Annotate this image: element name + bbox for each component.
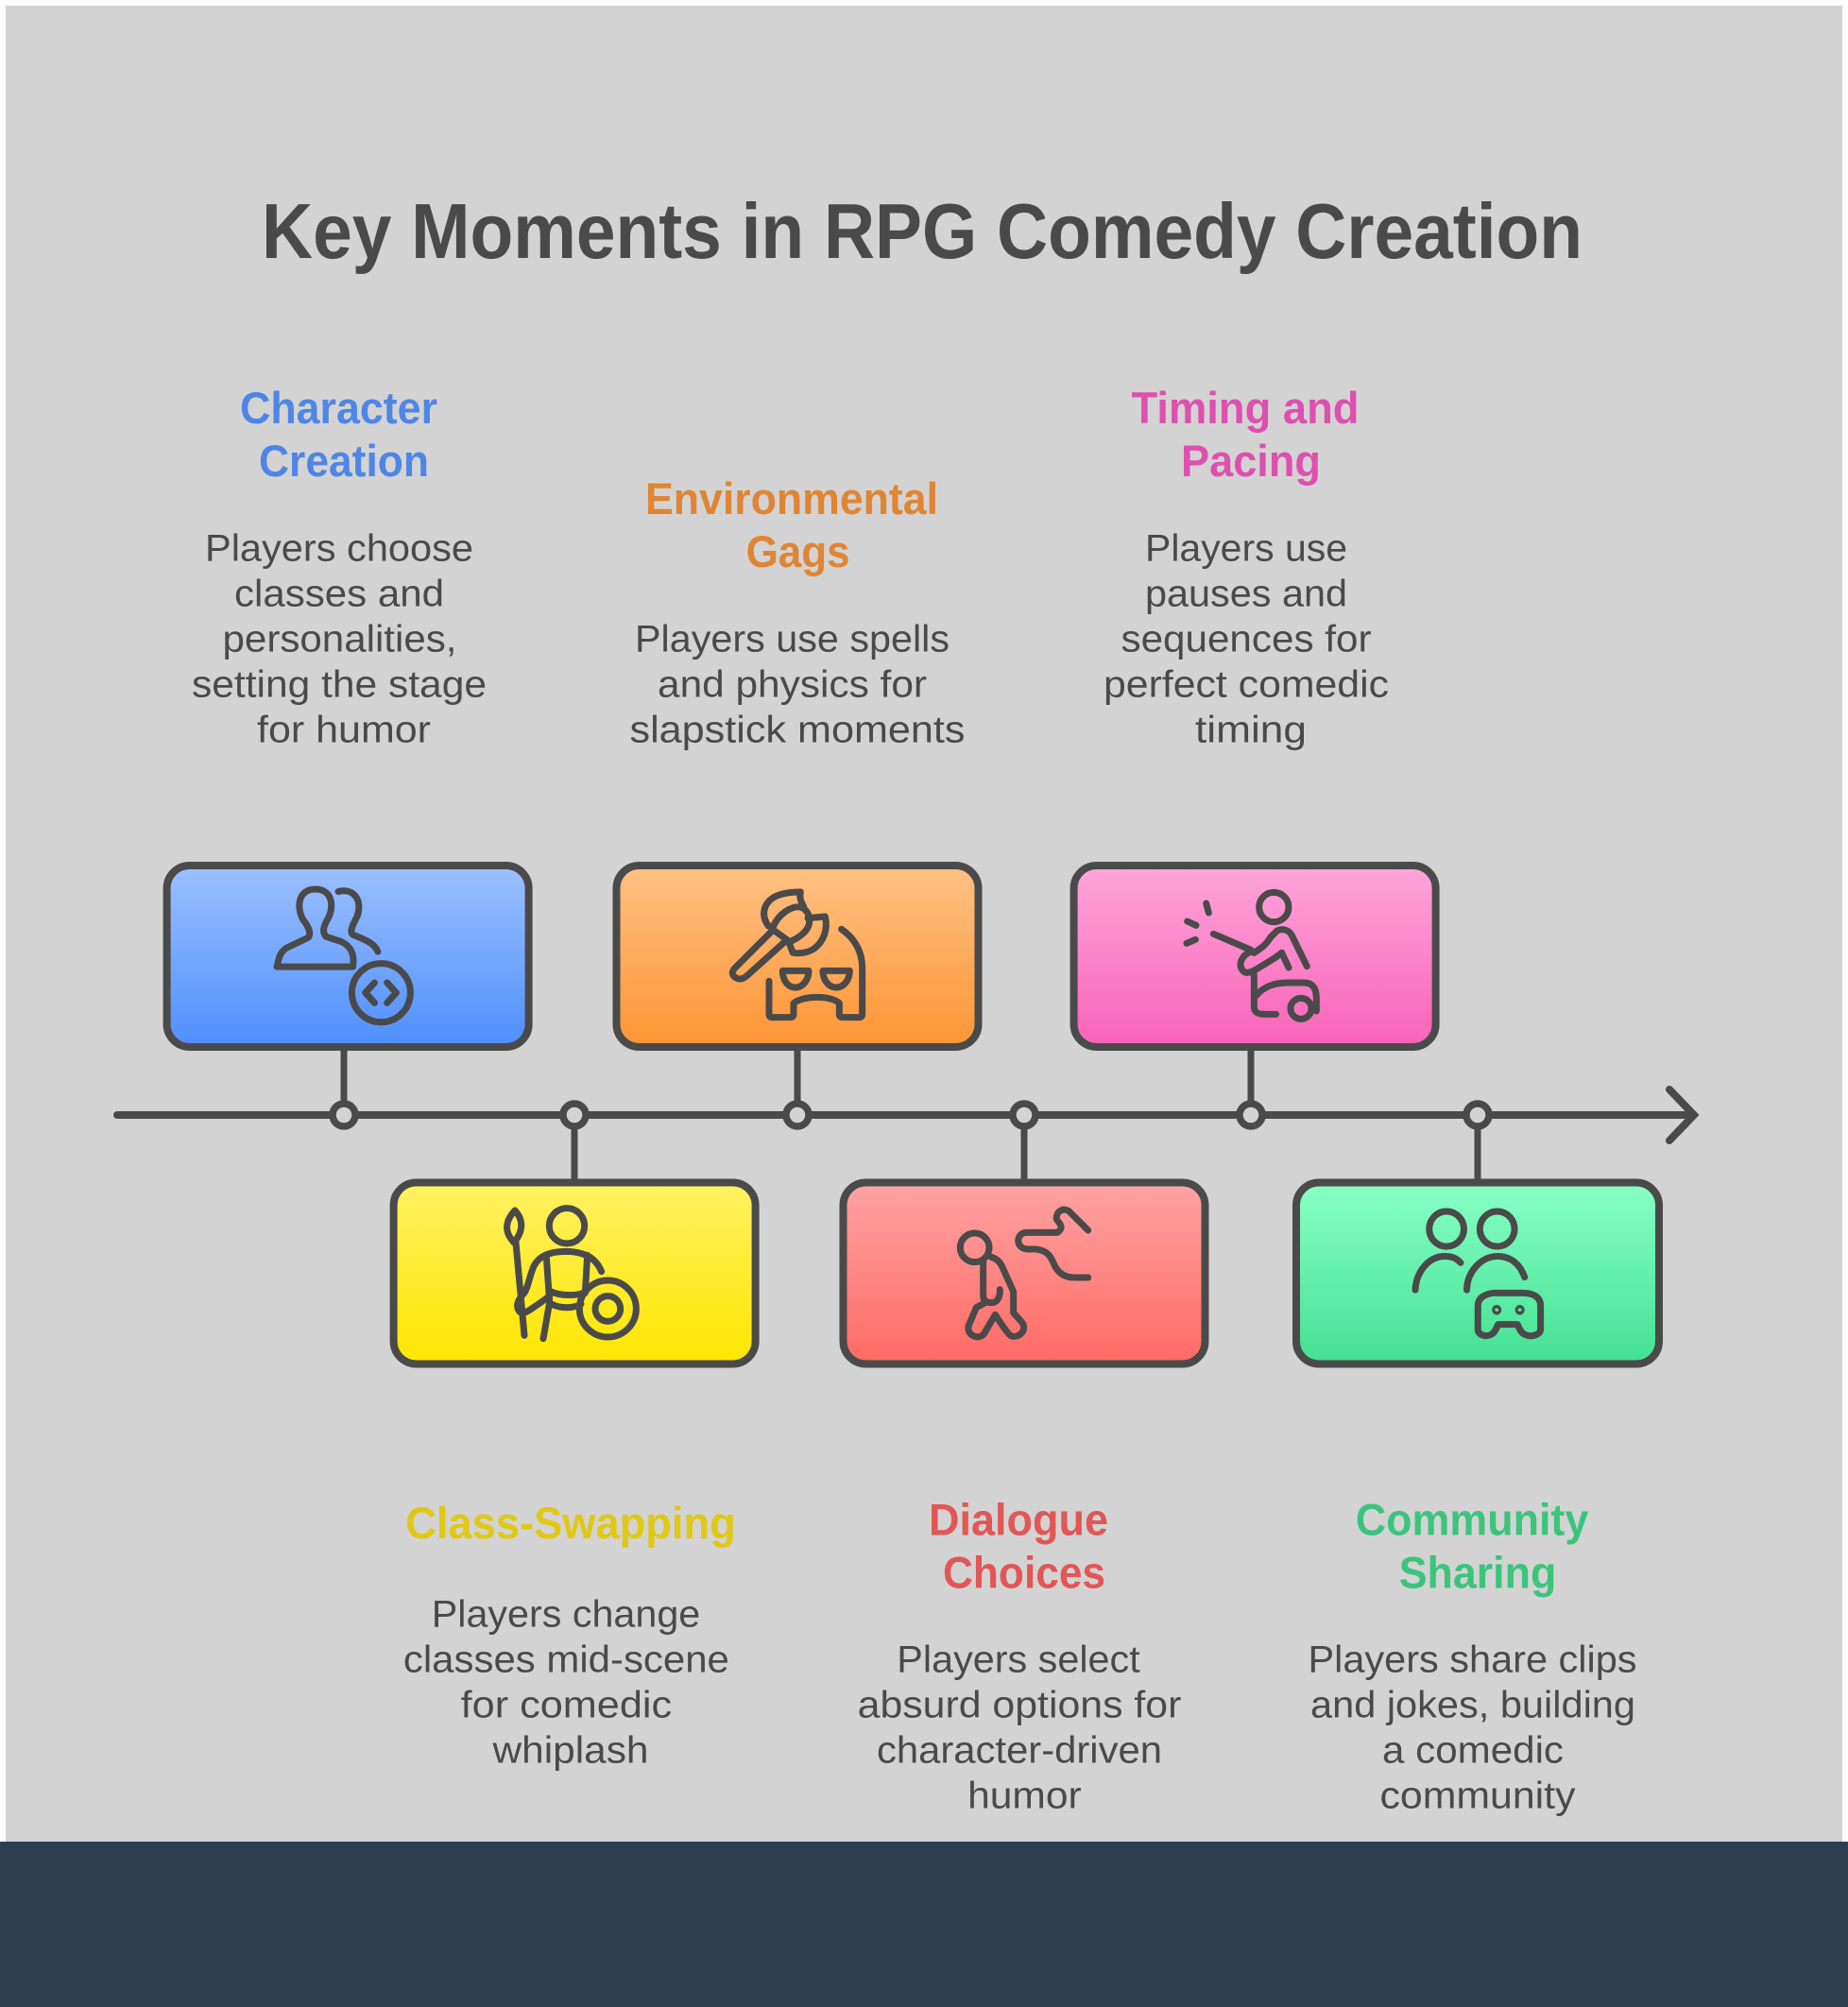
- connector: [1247, 1051, 1255, 1104]
- description: [403, 1593, 729, 1771]
- box: [167, 866, 529, 1047]
- panel: timing and pacing: [1074, 383, 1436, 1126]
- description: whiplash: [491, 1729, 648, 1771]
- panel: class-swapping: [394, 1104, 756, 1771]
- timeline axis with arrow: [117, 1089, 1694, 1141]
- heading: Character: [240, 383, 437, 433]
- node: [1466, 1104, 1489, 1126]
- icon: users with code badge: [277, 889, 410, 1022]
- description: [1308, 1638, 1636, 1816]
- description: [192, 527, 487, 750]
- description: [858, 1638, 1181, 1816]
- description: humor: [967, 1775, 1082, 1816]
- panel: community sharing: [1296, 1104, 1659, 1816]
- description: community: [1379, 1775, 1576, 1816]
- description: Players select: [897, 1638, 1140, 1680]
- description: timing: [1195, 709, 1307, 750]
- node: [786, 1104, 809, 1126]
- heading: Pacing: [1181, 436, 1321, 486]
- heading: Class-Swapping: [405, 1498, 736, 1548]
- connector: [1474, 1126, 1481, 1179]
- icon: people with game controller: [1415, 1211, 1541, 1336]
- node: [563, 1104, 586, 1126]
- description: perfect comedic: [1104, 663, 1389, 705]
- panel: environmental gags: [616, 473, 979, 1126]
- panel: character creation: [167, 383, 529, 1126]
- box: [394, 1183, 756, 1364]
- description: [1104, 527, 1389, 750]
- connector: [571, 1126, 578, 1179]
- description: personalities,: [223, 618, 457, 660]
- title: Key Moments in RPG Comedy Creation: [262, 187, 1583, 275]
- description: Players use spells: [635, 618, 950, 660]
- description: absurd options for: [858, 1684, 1181, 1725]
- box: [1296, 1183, 1659, 1364]
- heading: Community: [1356, 1495, 1588, 1544]
- heading: Timing and: [1132, 383, 1359, 433]
- description: Players change: [432, 1593, 700, 1635]
- heading: [1132, 383, 1359, 486]
- description: for comedic: [461, 1684, 672, 1725]
- description: classes and: [234, 573, 444, 614]
- description: and jokes, building: [1310, 1684, 1635, 1725]
- icon: axe and helmet: [732, 892, 863, 1018]
- description: a comedic: [1382, 1729, 1564, 1771]
- connector: [1020, 1126, 1028, 1179]
- node: [1240, 1104, 1262, 1126]
- panel: dialogue choices: [843, 1104, 1206, 1816]
- node: [1013, 1104, 1035, 1126]
- footer band: [0, 1842, 1848, 2007]
- icon: warrior with spear and shield: [507, 1209, 636, 1339]
- heading: [929, 1495, 1108, 1597]
- description: [629, 618, 966, 750]
- description: and physics for: [658, 663, 927, 705]
- description: for humor: [257, 709, 431, 750]
- description: sequences for: [1121, 618, 1372, 660]
- description: Players share clips: [1308, 1638, 1636, 1680]
- heading: Sharing: [1399, 1548, 1556, 1597]
- connector: [794, 1051, 801, 1104]
- box: [616, 866, 979, 1047]
- description: setting the stage: [192, 663, 487, 705]
- heading: Choices: [943, 1548, 1105, 1597]
- connector: [340, 1051, 348, 1104]
- box: [1074, 866, 1436, 1047]
- description: Players choose: [205, 527, 473, 569]
- description: character-driven: [877, 1729, 1162, 1771]
- description: Players use: [1145, 527, 1347, 569]
- description: pauses and: [1145, 573, 1347, 614]
- heading: [240, 383, 437, 486]
- heading: [645, 473, 938, 576]
- icon: seated figure gesturing: [1187, 892, 1316, 1019]
- description: classes mid-scene: [403, 1638, 729, 1680]
- heading: Gags: [746, 526, 850, 576]
- node: [333, 1104, 355, 1126]
- heading: Creation: [259, 436, 429, 486]
- heading: Environmental: [645, 473, 938, 523]
- heading: Dialogue: [929, 1495, 1108, 1544]
- icon: figure and speech wave: [960, 1209, 1088, 1337]
- box: [843, 1183, 1206, 1364]
- description: slapstick moments: [629, 709, 966, 750]
- heading: [1356, 1495, 1588, 1597]
